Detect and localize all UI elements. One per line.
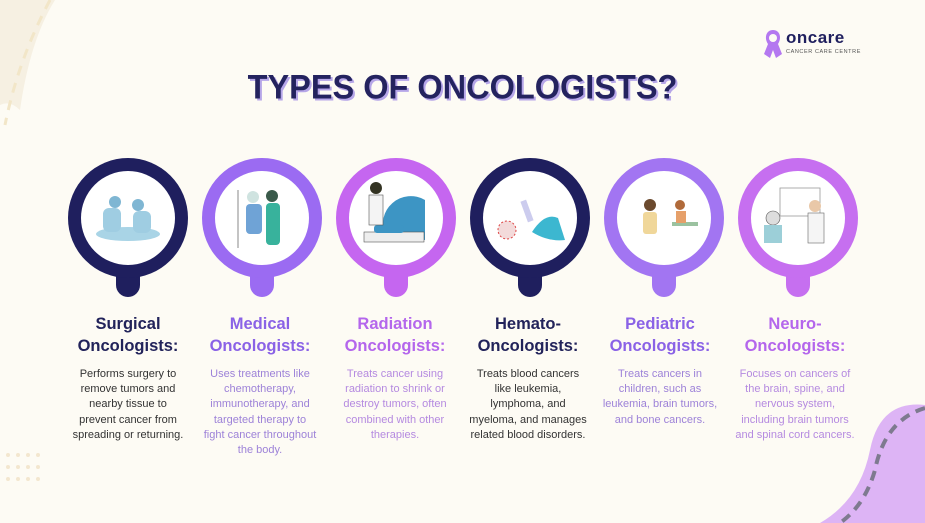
heading: medical — [210, 315, 310, 355]
text: medical: chemotherapy, — [224, 383, 296, 395]
heading: hemato — [478, 315, 578, 355]
text: neuro: the brain, spine, and — [745, 383, 845, 395]
text: surgical — [73, 368, 183, 441]
icon: medical pin — [202, 158, 322, 297]
text: pediatric: leukemia, brain tumors, — [603, 398, 717, 410]
text: hemato: related blood disorders. — [471, 429, 585, 441]
text: pediatric: Treats cancers in — [618, 368, 702, 380]
heading: hemato: Hemato- — [495, 315, 561, 333]
heading: radiation: Oncologists: — [345, 337, 445, 355]
heading: hemato: Oncologists: — [478, 337, 578, 355]
text: surgical: spreading or returning. — [73, 429, 183, 441]
text: medical: fight cancer throughout — [204, 429, 316, 441]
icon: pediatric pin — [604, 158, 724, 297]
heading: neuro: Oncologists: — [745, 337, 845, 355]
text: hemato: Treats blood cancers — [477, 368, 579, 380]
text: radiation: radiation to shrink or — [345, 383, 445, 395]
icon: surgical pin — [68, 158, 188, 297]
text: medical: the body. — [238, 444, 282, 456]
logo — [764, 28, 861, 58]
heading: surgical — [78, 315, 178, 355]
heading: neuro — [745, 315, 845, 355]
heading: neuro: Neuro- — [768, 315, 822, 333]
heading: surgical: Oncologists: — [78, 337, 178, 355]
heading: radiation — [345, 315, 445, 355]
text: surgical: remove tumors and — [81, 383, 175, 395]
text: radiation: combined with other — [346, 414, 444, 426]
text: pediatric: children, such as — [619, 383, 701, 395]
text: medical: Uses treatments like — [210, 368, 310, 380]
text: surgical: prevent cancer from — [79, 414, 177, 426]
heading: medical: Medical — [230, 315, 290, 333]
text: hemato: lymphoma, and — [490, 398, 566, 410]
text: neuro: nervous system, — [755, 398, 835, 410]
heading: pediatric: Oncologists: — [610, 337, 710, 355]
icon: neuro pin — [738, 158, 858, 297]
text: hemato: myeloma, and manages — [469, 414, 587, 426]
icon: radiation pin — [336, 158, 456, 297]
heading: surgical: Surgical — [95, 315, 161, 333]
text: neuro — [735, 368, 855, 441]
text: radiation: destroy tumors, often — [343, 398, 447, 410]
heading: pediatric: Pediatric — [625, 315, 695, 333]
text: hemato: like leukemia, — [495, 383, 561, 395]
title: TYPES OF ONCOLOGISTS? — [248, 68, 677, 106]
text: medical: immunotherapy, and — [210, 398, 310, 410]
icon: hemato pin — [470, 158, 590, 297]
logo: oncare — [786, 28, 845, 47]
text: surgical: nearby tissue to — [89, 398, 167, 410]
text: pediatric: and bone cancers. — [615, 414, 705, 426]
text: surgical: Performs surgery to — [80, 368, 176, 380]
heading: pediatric — [610, 315, 710, 355]
text: pediatric — [603, 368, 717, 426]
text: radiation: Treats cancer using — [347, 368, 443, 380]
text: neuro: including brain tumors — [741, 414, 849, 426]
heading: medical: Oncologists: — [210, 337, 310, 355]
text: neuro: and spinal cord cancers. — [735, 429, 855, 441]
text: medical — [204, 368, 316, 456]
text: hemato — [469, 368, 587, 441]
text: neuro: Focuses on cancers of — [740, 368, 850, 380]
heading: radiation: Radiation — [357, 315, 433, 333]
logo: CANCER CARE CENTRE — [786, 49, 861, 55]
text: medical: targeted therapy to — [214, 414, 306, 426]
text: radiation: therapies. — [371, 429, 419, 441]
text: radiation — [343, 368, 447, 441]
